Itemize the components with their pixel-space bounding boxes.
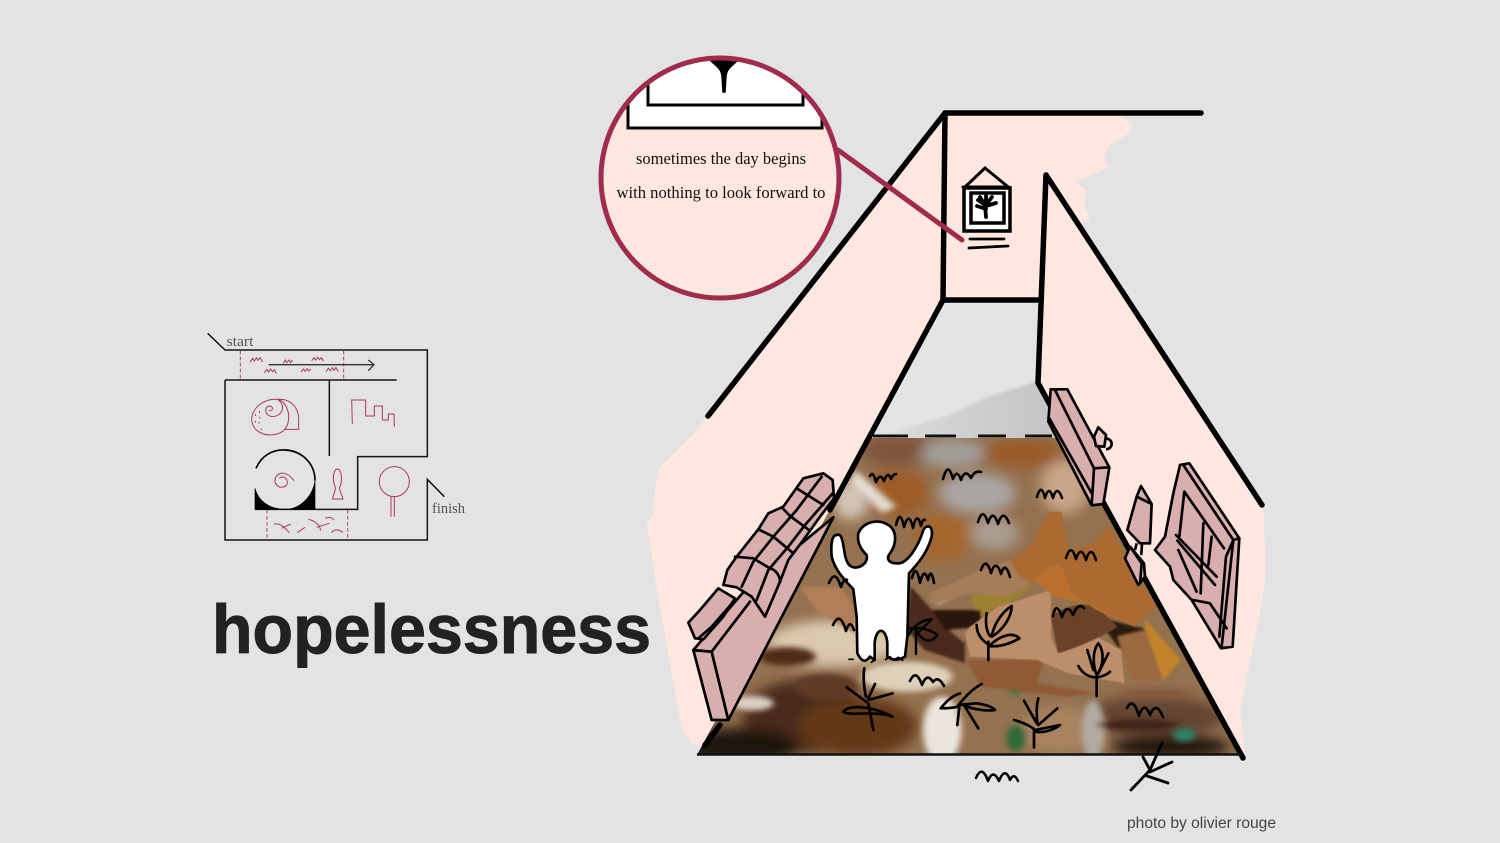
- window: [1155, 463, 1239, 648]
- figure: [831, 522, 932, 663]
- grey smudge behind floor: [875, 382, 1055, 440]
- floor front edge: [697, 753, 1240, 756]
- magnifier callout: [601, 40, 839, 298]
- grass tuft below floor: [1131, 743, 1172, 790]
- maze walls: [208, 333, 444, 540]
- zoomed wall and shelf: [626, 61, 824, 130]
- tuft beside figure: [907, 619, 937, 654]
- wall: right: [1038, 175, 1265, 755]
- maze chamber arc: [256, 450, 315, 481]
- poster caption lines: [969, 239, 1008, 248]
- label: finish: finish: [432, 501, 466, 517]
- lamp: [1125, 486, 1152, 585]
- photo credit: photo by olivier rouge: [1127, 815, 1276, 832]
- maze map: [208, 333, 444, 540]
- wall: left: [647, 113, 945, 747]
- squiggle marks: [829, 470, 1163, 717]
- title: hopelessness: [212, 591, 651, 668]
- room outlines: [705, 113, 1262, 758]
- maze pink squiggles and icons: [250, 357, 409, 533]
- poster plant: [977, 196, 996, 217]
- callout text: with nothing to look forward to: [616, 183, 826, 202]
- wall: back: [945, 113, 1133, 300]
- room illustration: [647, 113, 1265, 790]
- poster: [963, 168, 1010, 248]
- sharp oak leaf: [930, 512, 1156, 683]
- floor photo: [698, 438, 1238, 754]
- dashed far floor edge: [873, 434, 1052, 438]
- shelf with cup: [1048, 389, 1112, 505]
- squiggle below floor: [976, 772, 1018, 781]
- maze hatch marks: [240, 351, 348, 540]
- maze arrow: [269, 360, 374, 371]
- label: start: start: [226, 334, 254, 350]
- callout text: sometimes the day begins: [636, 149, 806, 168]
- maze round chamber: [255, 481, 315, 509]
- connector line: [838, 150, 962, 240]
- sofa: [688, 473, 834, 720]
- grass tufts: [843, 606, 1110, 747]
